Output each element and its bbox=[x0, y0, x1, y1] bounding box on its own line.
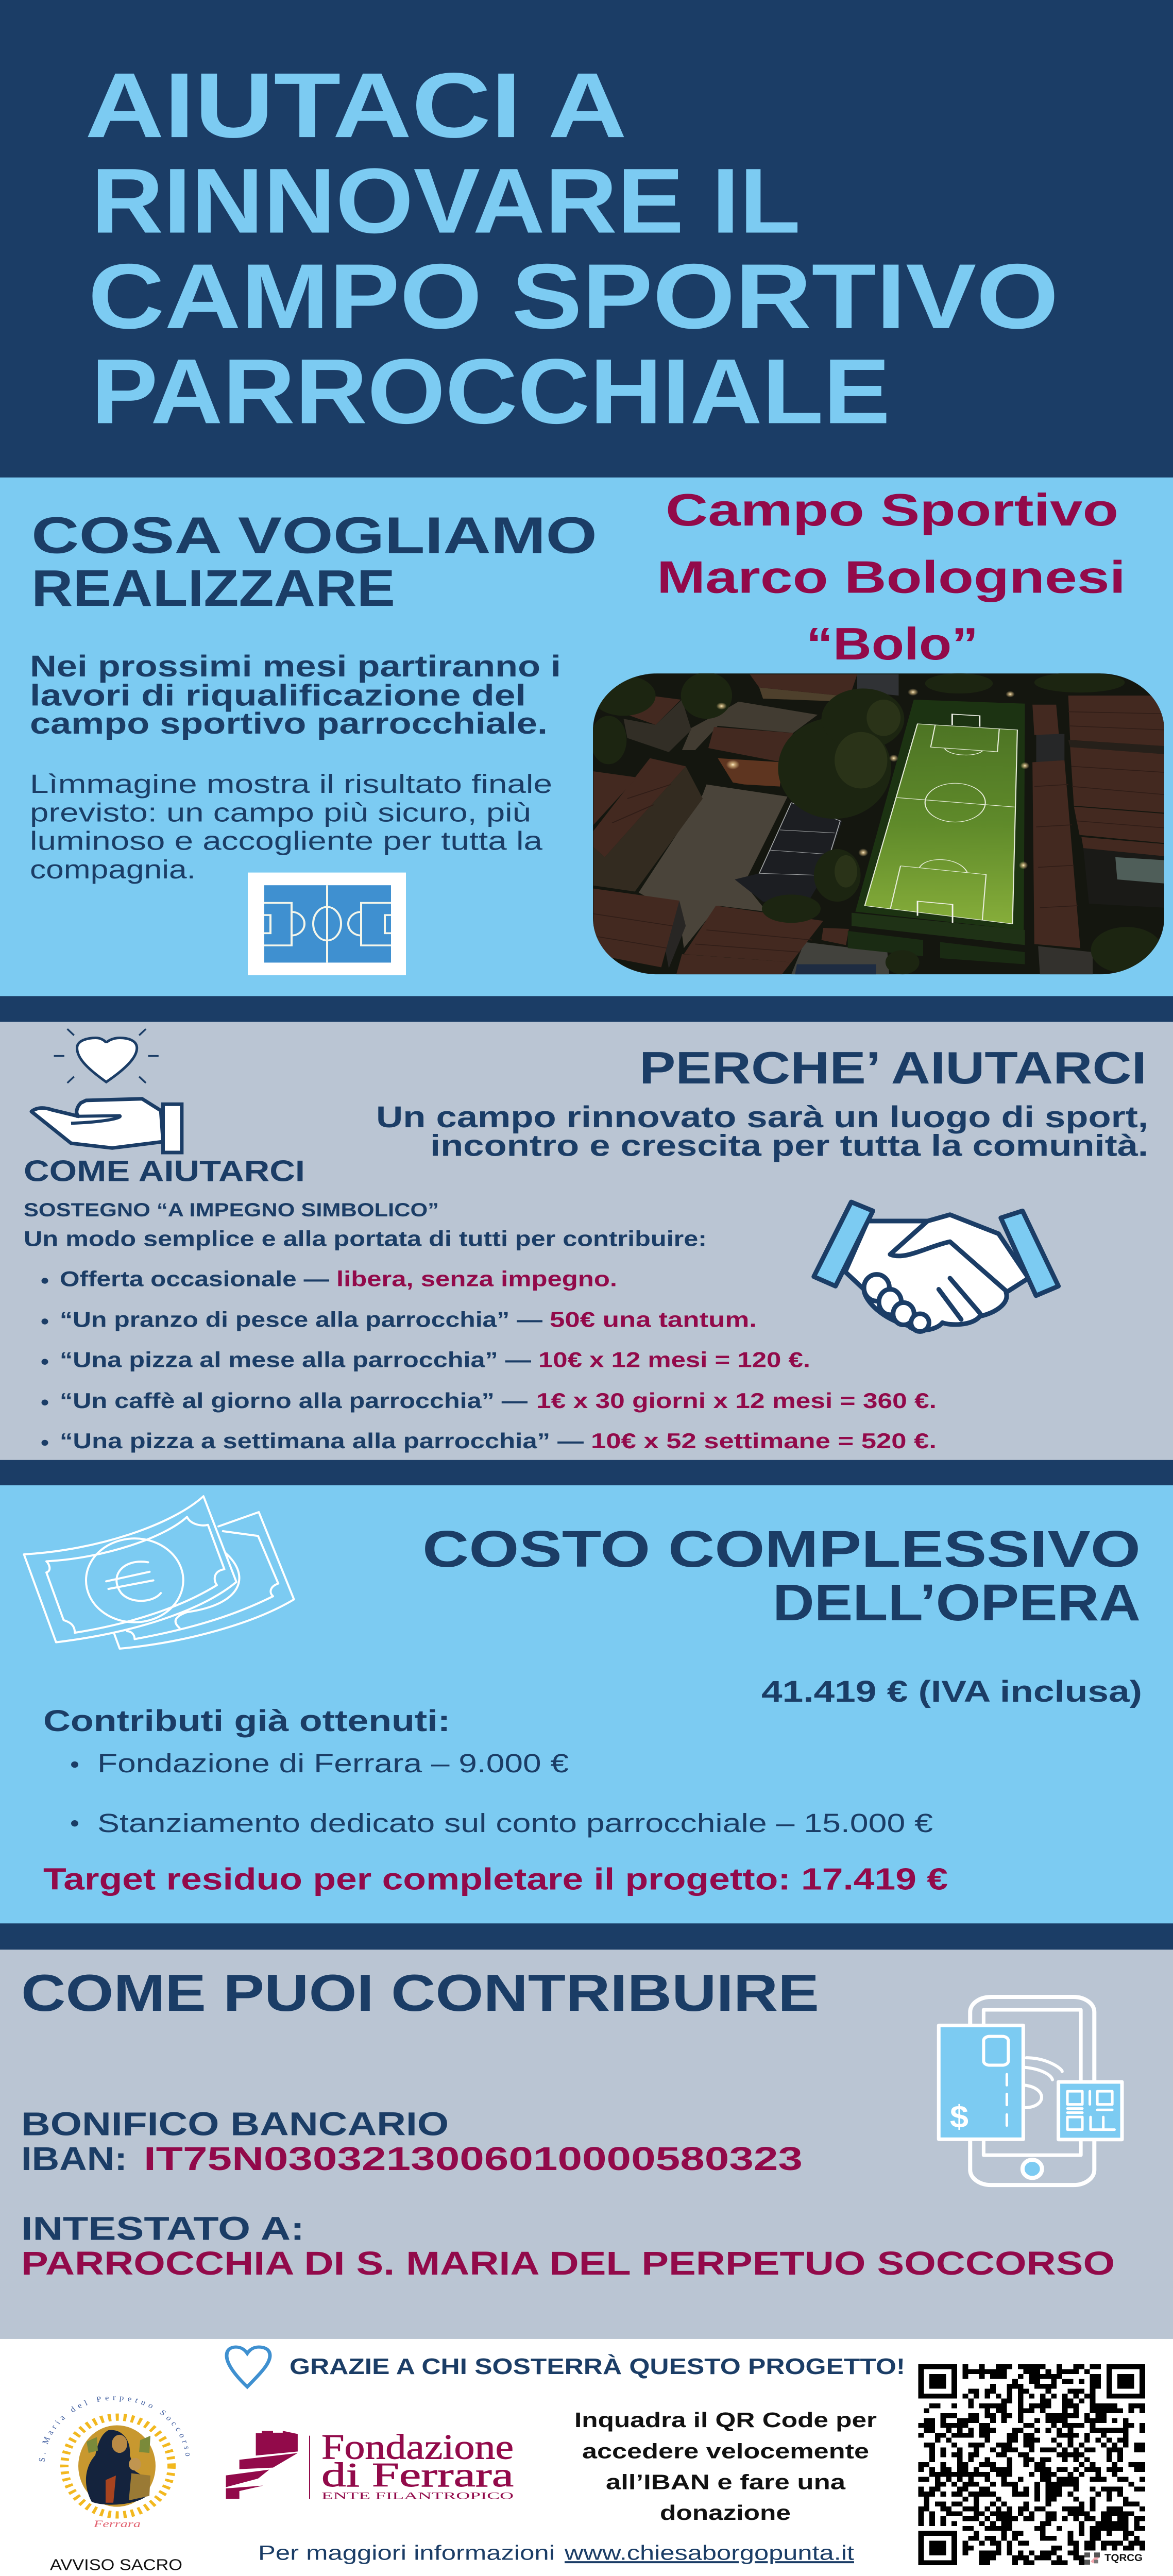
title bbox=[85, 54, 1059, 443]
text block: perche aiutarci description bbox=[376, 1100, 1148, 1163]
icon: blue heart bbox=[227, 2347, 270, 2387]
panel: footer bbox=[0, 2339, 1173, 2576]
text: avviso sacro: AVVISO SACRO bbox=[50, 2556, 182, 2573]
text: contributions heading: Contributi già ottenuti: bbox=[43, 1704, 450, 1738]
text block: bank transfer: BONIFICO BANCARIO bbox=[21, 2106, 449, 2142]
text block: qr code instructions: all’IBAN e fare una bbox=[606, 2471, 846, 2494]
list: contributions: Fondazione di Ferrara – 9.000 € bbox=[97, 1749, 569, 1778]
goals bbox=[917, 714, 980, 923]
text block: image description: compagnia. bbox=[30, 855, 196, 884]
list: contributions: Stanziamento dedicato sul conto parrocchiale – 15.000 € bbox=[97, 1808, 933, 1838]
text: more information link: www.chiesaborgopunta.it bbox=[564, 2541, 854, 2564]
list: donation options: 10€ x 12 mesi = 120 €. bbox=[538, 1347, 810, 1372]
title: CAMPO SPORTIVO bbox=[88, 244, 1059, 348]
list: donation options: “Una pizza al mese alla parrocchia” — bbox=[60, 1347, 532, 1372]
list: donation options: “Un caffè al giorno alla parrocchia” — bbox=[60, 1388, 528, 1413]
text block: intro bold: lavori di riqualificazione del bbox=[30, 679, 526, 713]
panel: perche aiutarci e come aiutarci bbox=[0, 1022, 1173, 1460]
text block: qr code instructions: donazione bbox=[660, 2502, 791, 2524]
text block: sostegno intro bbox=[24, 1200, 707, 1251]
lights bbox=[716, 688, 1029, 869]
qr code: TQRCG bbox=[1104, 2552, 1143, 2564]
logo: fondazione di ferrara: di Ferrara bbox=[321, 2456, 514, 2494]
icon: handshake bbox=[814, 1202, 1059, 1331]
list: donation options: 10€ x 52 settimane = 520 €. bbox=[591, 1429, 937, 1453]
heading: come puoi contribuire: COME PUOI CONTRIBUIRE bbox=[21, 1963, 819, 2022]
title: RINNOVARE IL bbox=[91, 149, 801, 252]
list: donation options: 50€ una tantum. bbox=[550, 1307, 757, 1332]
text: residual target: Target residuo per completare il progetto: 17.419 € bbox=[43, 1861, 948, 1896]
heading: campo sportivo name: Marco Bolognesi bbox=[657, 552, 1126, 602]
heading: cosa vogliamo realizzare: COSA VOGLIAMO bbox=[31, 506, 597, 564]
text block: bank transfer bbox=[21, 2106, 803, 2177]
logo: parish seal: Ferrara bbox=[93, 2519, 141, 2530]
hedges bbox=[852, 913, 1025, 945]
heading: cosa vogliamo realizzare: REALIZZARE bbox=[31, 560, 395, 617]
text block: account holder: PARROCCHIA DI S. MARIA DEL PERPETUO SOCCORSO bbox=[21, 2245, 1115, 2282]
text block: image description: previsto: un campo più sicuro, più bbox=[30, 798, 531, 827]
heading: campo sportivo name bbox=[657, 485, 1126, 669]
roofs bbox=[593, 674, 1164, 974]
heading: campo sportivo name: Campo Sportivo bbox=[666, 485, 1118, 535]
heading: cosa vogliamo realizzare bbox=[31, 506, 597, 617]
text block: perche aiutarci description: Un campo rinnovato sarà un luogo di sport, bbox=[376, 1100, 1148, 1134]
heading: costo complessivo: DELL’OPERA bbox=[773, 1573, 1141, 1631]
icon: banknotes bbox=[24, 1496, 294, 1649]
logo: parish seal: S. Maria del Perpetuo Soccorso bbox=[39, 2396, 190, 2462]
list: donation options bbox=[41, 1266, 937, 1453]
list: donation options: libera, senza impegno. bbox=[336, 1266, 617, 1291]
list: contributions bbox=[71, 1749, 933, 1838]
icon: football pitch bbox=[248, 873, 406, 975]
title: PARROCCHIALE bbox=[91, 340, 890, 443]
text block: account holder bbox=[21, 2210, 1115, 2282]
heading: costo complessivo: COSTO COMPLESSIVO bbox=[422, 1520, 1141, 1578]
list: donation options: “Un pranzo di pesce alla parrocchia” — bbox=[60, 1307, 543, 1332]
text block: intro bold bbox=[30, 650, 561, 740]
list: donation options: “Una pizza a settimana alla parrocchia” — bbox=[60, 1429, 584, 1453]
buildings walls bbox=[593, 766, 703, 891]
logo: fondazione di ferrara: ENTE FILANTROPICO bbox=[321, 2491, 514, 2501]
panel: title band bbox=[0, 0, 1173, 477]
text block: qr code instructions: Inquadra il QR Code per bbox=[574, 2409, 877, 2432]
text block: sostegno intro: SOSTEGNO “A IMPEGNO SIMBOLICO” bbox=[24, 1200, 439, 1221]
text: more information link bbox=[258, 2541, 854, 2564]
icon: heart with rays bbox=[54, 1029, 159, 1083]
trees bbox=[590, 672, 1163, 974]
text block: image description: luminoso e accogliente per tutta la bbox=[30, 826, 543, 856]
text block: image description bbox=[30, 769, 552, 884]
heading: perche aiutarci: PERCHE’ AIUTARCI bbox=[639, 1043, 1147, 1093]
text: more information link: Per maggiori informazioni bbox=[258, 2541, 555, 2564]
photo: illuminated sports field at night bbox=[590, 672, 1164, 974]
list: donation options: Offerta occasionale — bbox=[60, 1266, 330, 1291]
text: thanks: GRAZIE A CHI SOSTERRÀ QUESTO PROGETTO! bbox=[290, 2353, 905, 2379]
text block: sostegno intro: Un modo semplice e alla portata di tutti per contribuire: bbox=[24, 1227, 707, 1251]
text block: qr code instructions: accedere velocemente bbox=[582, 2440, 869, 2463]
text block: perche aiutarci description: incontro e crescita per tutta la comunità. bbox=[430, 1129, 1148, 1163]
heading: campo sportivo name: “Bolo” bbox=[806, 619, 978, 669]
text block: bank transfer: IT75N0303213006010000580323 bbox=[144, 2140, 803, 2177]
logo: fondazione di ferrara bbox=[226, 2428, 514, 2501]
logo: fondazione di ferrara: Fondazione bbox=[321, 2428, 514, 2466]
text block: bank transfer: IBAN: bbox=[21, 2140, 127, 2177]
courtyard bbox=[639, 785, 788, 948]
text block: account holder: INTESTATO A: bbox=[21, 2210, 304, 2247]
text block: qr code instructions bbox=[574, 2409, 877, 2524]
text block: intro bold: campo sportivo parrocchiale. bbox=[30, 707, 548, 740]
panel: costo complessivo bbox=[0, 1485, 1173, 1923]
text block: image description: Lìmmagine mostra il risultato finale bbox=[30, 769, 552, 799]
icon: open hand bbox=[31, 1099, 182, 1153]
text block: intro bold: Nei prossimi mesi partiranno i bbox=[30, 650, 561, 683]
title: AIUTACI A bbox=[85, 54, 627, 157]
list: donation options: 1€ x 30 giorni x 12 mesi = 360 €. bbox=[536, 1388, 937, 1413]
icon: phone payment bbox=[939, 1997, 1122, 2185]
fence and pitch bbox=[855, 700, 1025, 930]
panel: cosa vogliamo realizzare bbox=[0, 478, 1173, 996]
heading: come aiutarci: COME AIUTARCI bbox=[24, 1155, 305, 1188]
text: total cost: 41.419 € (IVA inclusa) bbox=[761, 1675, 1142, 1708]
heading: costo complessivo bbox=[422, 1520, 1141, 1631]
icon: phone payment: $ bbox=[950, 2098, 968, 2134]
logo: parish seal bbox=[39, 2396, 190, 2530]
qr code bbox=[919, 2364, 1145, 2565]
panel: come puoi contribuire bbox=[0, 1950, 1173, 2339]
